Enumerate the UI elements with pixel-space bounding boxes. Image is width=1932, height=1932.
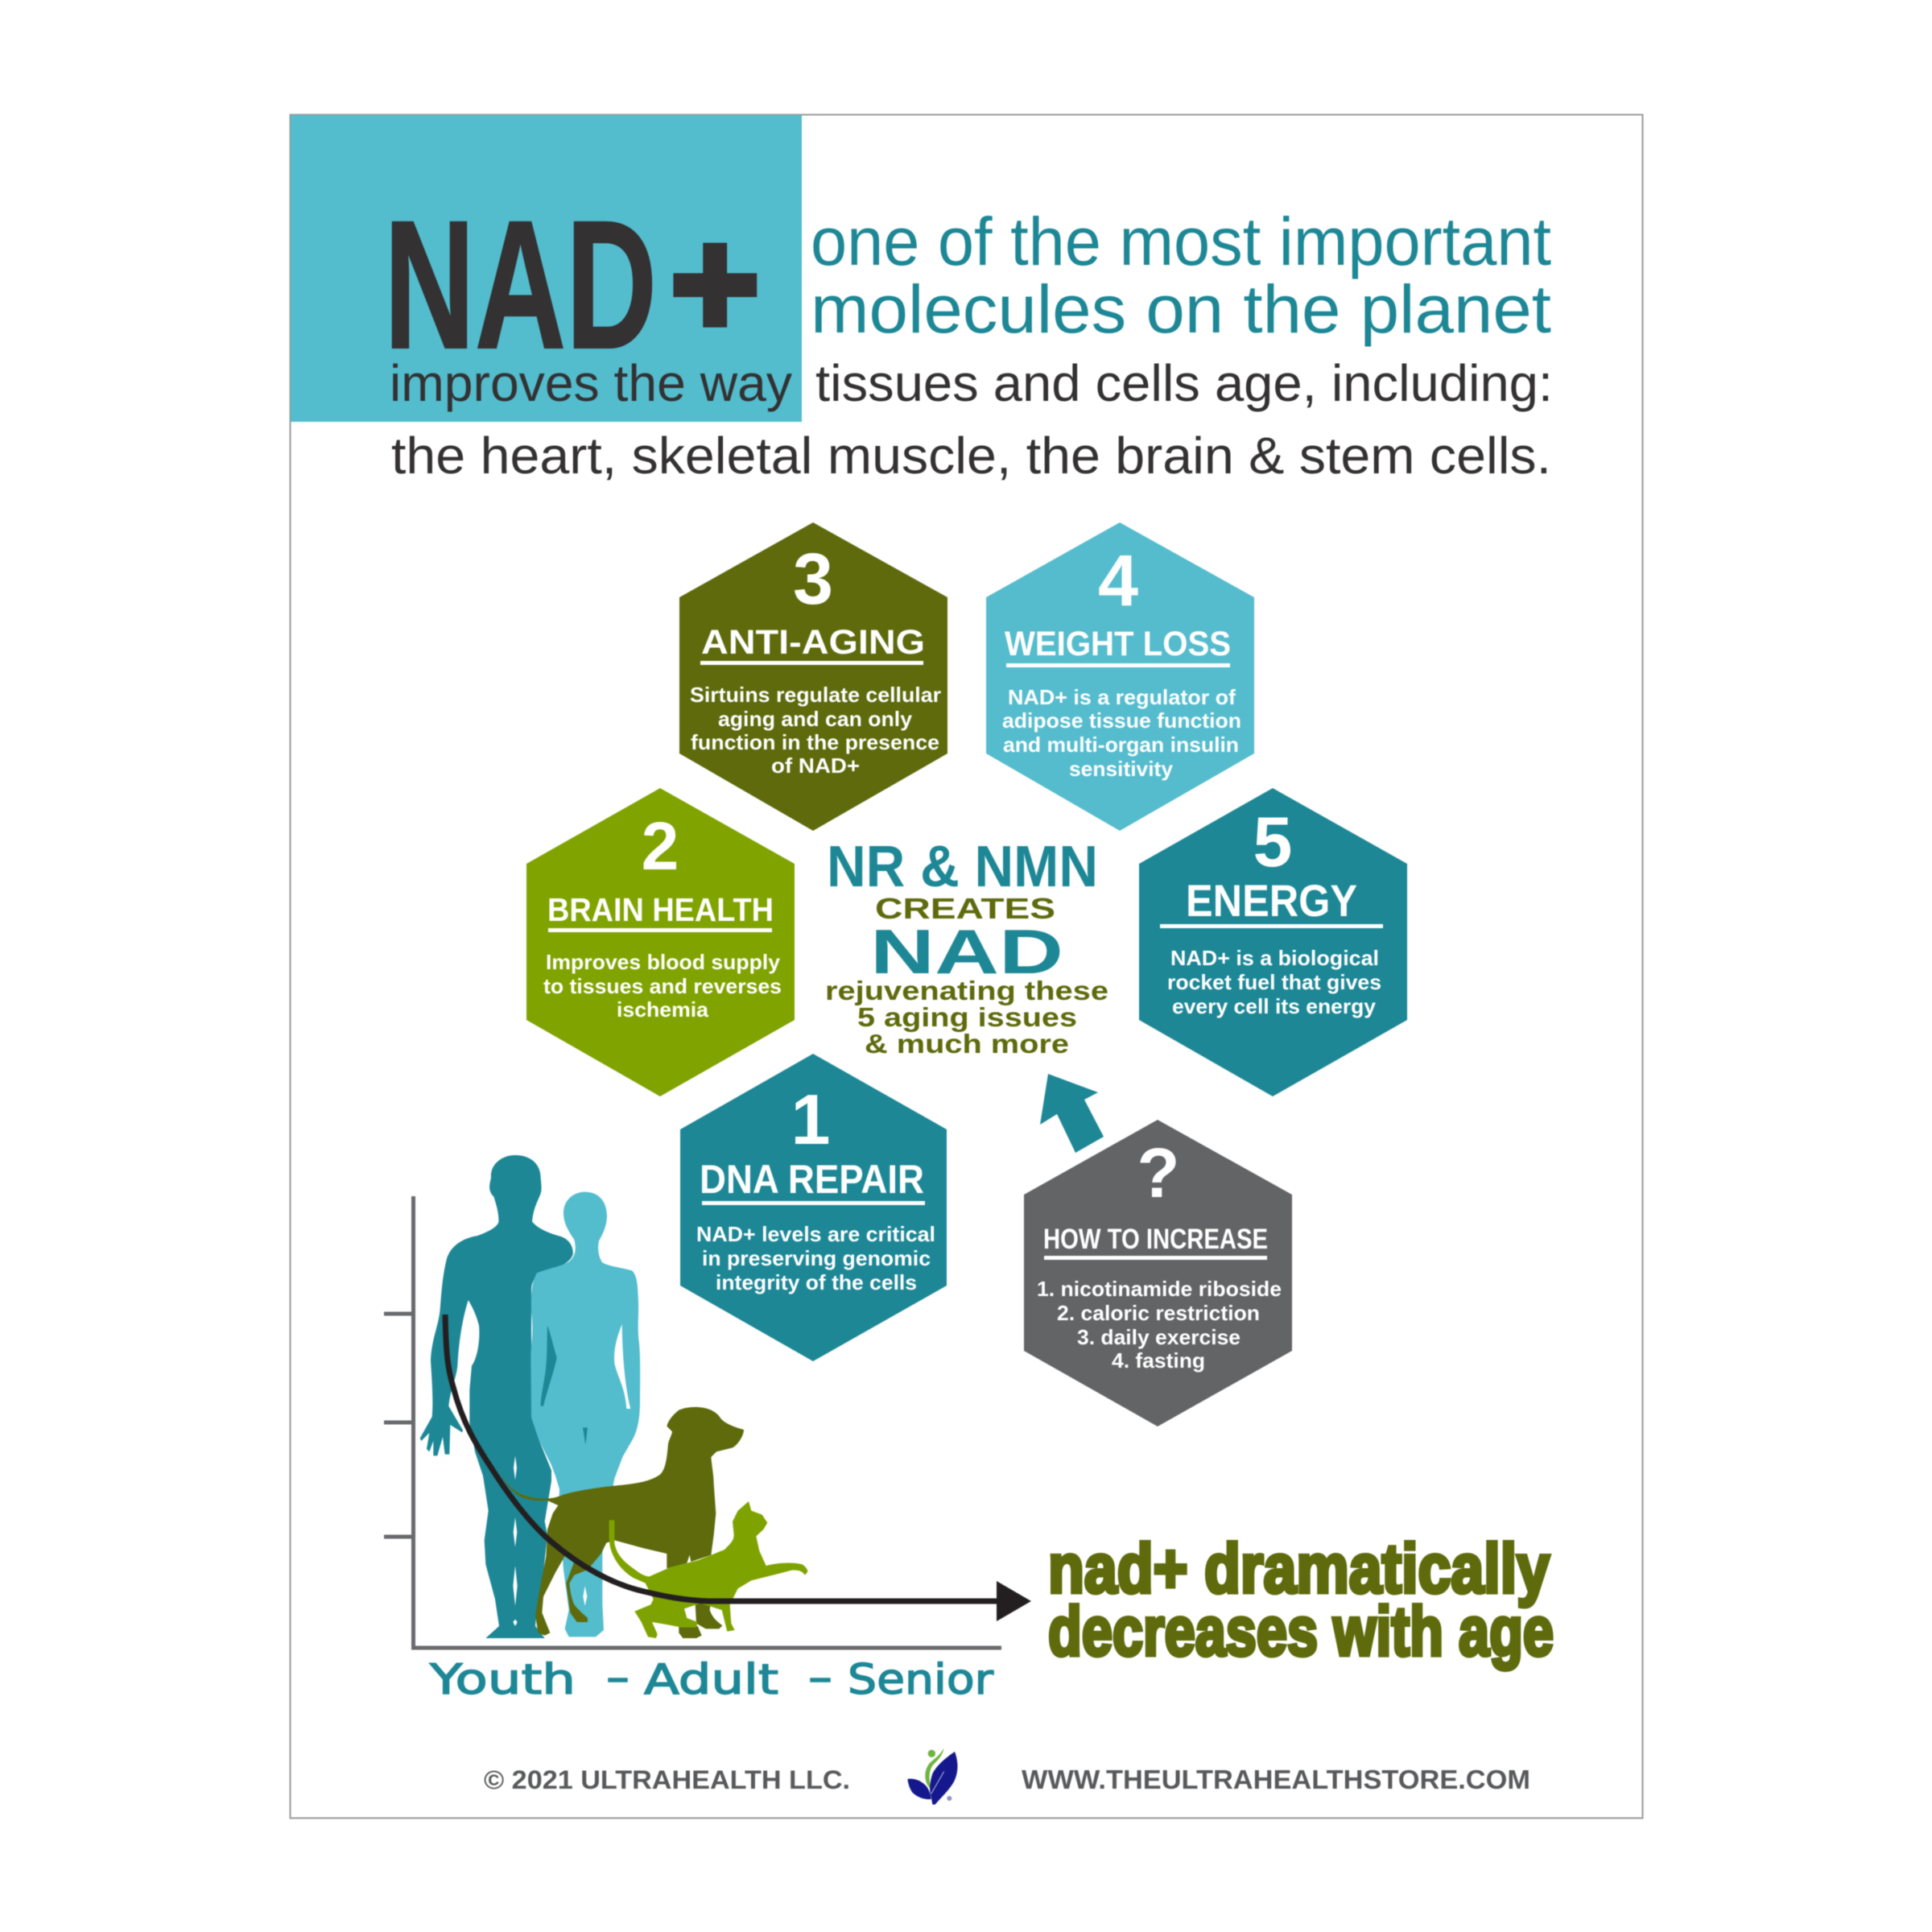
page frame [290, 114, 1642, 1818]
silhouette: man [420, 1155, 573, 1638]
age axis labels [429, 1656, 994, 1704]
hexagon 2: brain health: to tissues and reverses [543, 974, 782, 998]
subheading text: improves the way [390, 354, 792, 412]
woman arm gaps [541, 1326, 557, 1406]
hexagon 4: weight loss [986, 522, 1254, 831]
hexagon 3: anti-aging: Sirtuins regulate cellular [690, 683, 941, 707]
title: NAD+: NAD [384, 184, 657, 387]
hexagon 2: brain health: BRAIN HEALTH [547, 891, 774, 928]
center text: NR & NMN creates NAD [825, 835, 1108, 1059]
hexagon 2: brain health: ischemia [617, 997, 709, 1022]
hexagon 3: anti-aging: ANTI-AGING [701, 623, 925, 662]
hexagon 5: energy: rocket fuel that gives [1167, 970, 1381, 994]
hexagon 5: energy: every cell its energy [1172, 994, 1377, 1018]
footer website: WWW.THEULTRAHEALTHSTORE.COM [1022, 1765, 1530, 1794]
hexagon 1: DNA repair: NAD+ levels are critical [696, 1222, 935, 1246]
silhouette: dog [500, 1407, 744, 1636]
hexagon 4: weight loss: NAD+ is a regulator of [1008, 685, 1236, 709]
center text: NR & NMN creates NAD: CREATES [875, 892, 1055, 925]
headline: one of the most important molecules on the planet [811, 204, 1551, 347]
hexagon 2: brain health: 2 [642, 808, 679, 884]
hexagon: how to increase: ? [1137, 1134, 1180, 1212]
silhouettes: dog and cat [500, 1407, 807, 1638]
callout: nad+ dramatically decreases with age: nad+ dramatically [1048, 1530, 1550, 1608]
age axis labels: Senior [848, 1656, 994, 1704]
hexagon 2: brain health: Improves blood supply [546, 950, 781, 974]
hexagon 5: energy: 5 [1253, 802, 1292, 881]
hexagon 3: anti-aging: function in the presence [691, 730, 939, 754]
age axis labels: Adult [644, 1656, 778, 1704]
hexagon 5: energy: ENERGY [1186, 875, 1357, 926]
hexagon 3: anti-aging: of NAD+ [771, 753, 860, 778]
age axis labels: Youth [429, 1656, 576, 1704]
subheading text: the heart, skeletal muscle, the brain & stem cells. [391, 427, 1551, 485]
arrow: how to increase to NAD [1040, 1074, 1104, 1153]
logo icon: leaves [907, 1748, 958, 1805]
decline curve arrow [445, 1315, 998, 1601]
hexagon 1: DNA repair [680, 1054, 947, 1361]
hexagon: how to increase: 3. daily exercise [1077, 1325, 1241, 1349]
man leg gaps [513, 1455, 518, 1626]
hexagon 3: anti-aging: aging and can only [718, 707, 913, 731]
hexagon 3: anti-aging [679, 522, 947, 831]
center text: NR & NMN creates NAD: & much more [865, 1029, 1069, 1059]
center text: NR & NMN creates NAD: rejuvenating these [825, 976, 1108, 1005]
headline: one of the most important molecules on the planet: one of the most important [811, 204, 1551, 279]
header teal block [291, 115, 802, 422]
silhouettes: man and woman [420, 1155, 640, 1638]
hexagon 3: anti-aging: 3 [793, 539, 833, 620]
chart axes [384, 1196, 1001, 1648]
hexagon 1: DNA repair: DNA REPAIR [700, 1157, 924, 1202]
subheading text [390, 354, 1553, 485]
hexagon: how to increase: 4. fasting [1112, 1348, 1205, 1373]
hexagon 1: DNA repair: 1 [791, 1080, 830, 1159]
center text: NR & NMN creates NAD: NAD [870, 916, 1063, 987]
hexagon 1: DNA repair: in preserving genomic [702, 1246, 931, 1270]
hexagon: how to increase [1024, 1120, 1292, 1426]
hexagon: how to increase: HOW TO INCREASE [1043, 1224, 1268, 1255]
title: NAD+: + [671, 199, 759, 369]
hexagon 4: weight loss: sensitivity [1069, 757, 1174, 781]
callout: nad+ dramatically decreases with age [1048, 1530, 1554, 1670]
hexagon: how to increase: 1. nicotinamide riboside [1037, 1277, 1282, 1301]
hexagon 4: weight loss: and multi-organ insulin [1003, 733, 1239, 757]
hexagon 4: weight loss: 4 [1098, 541, 1138, 621]
subheading text: tissues and cells age, including: [815, 354, 1553, 412]
footer copyright: © 2021 ULTRAHEALTH LLC. [484, 1765, 850, 1794]
silhouette: cat [609, 1501, 807, 1638]
headline: one of the most important molecules on the planet: molecules on the planet [811, 271, 1551, 347]
hexagon 1: DNA repair: integrity of the cells [716, 1270, 917, 1294]
hexagon 5: energy [1139, 788, 1407, 1096]
center text: NR & NMN creates NAD: NR & NMN [827, 835, 1098, 899]
silhouette: woman [530, 1192, 640, 1637]
hexagon: how to increase: 2. caloric restriction [1057, 1301, 1260, 1325]
hexagon 2: brain health [526, 788, 795, 1096]
hexagon 5: energy: NAD+ is a biological [1170, 946, 1379, 970]
hexagon 4: weight loss: WEIGHT LOSS [1005, 625, 1231, 663]
callout: nad+ dramatically decreases with age: decreases with age [1048, 1593, 1554, 1670]
hexagon 4: weight loss: adipose tissue function [1002, 708, 1241, 733]
center text: NR & NMN creates NAD: 5 aging issues [857, 1002, 1077, 1032]
arrowhead [997, 1581, 1031, 1621]
chart: NAD+ decline with age [384, 1155, 1031, 1704]
